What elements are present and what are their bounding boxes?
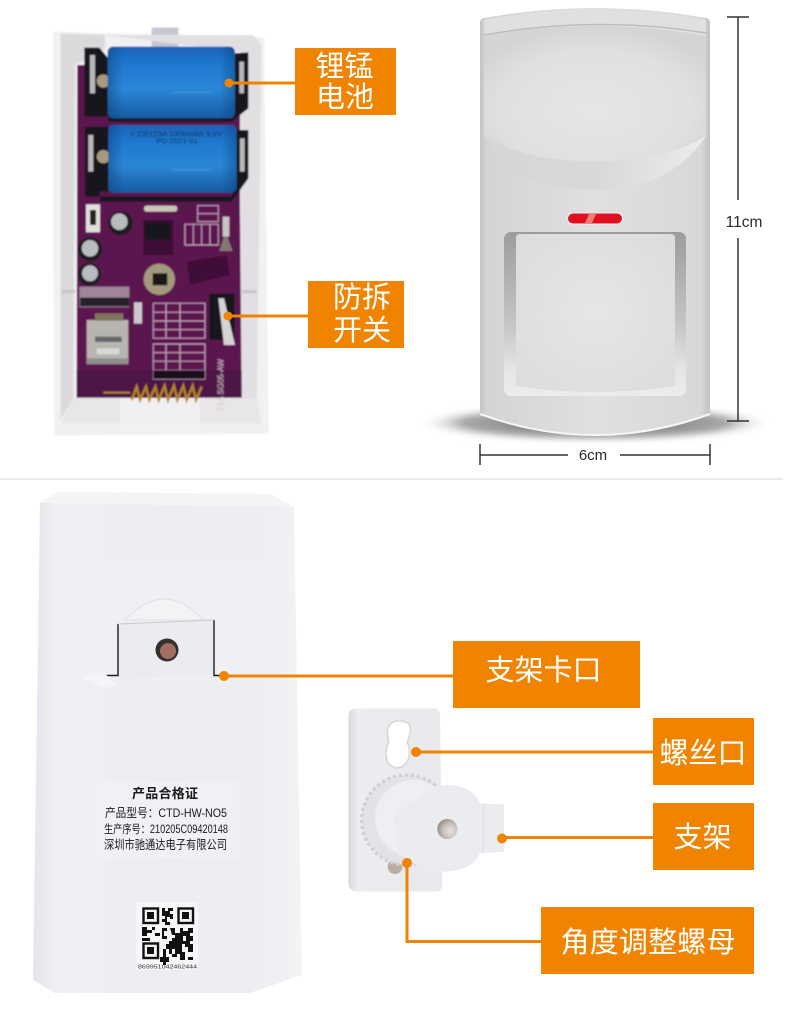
QR code bbox=[136, 902, 198, 970]
mounting tab bbox=[81, 599, 220, 688]
callout: lithium battery: 电池 bbox=[316, 81, 374, 114]
device casing bbox=[53, 28, 269, 436]
callout: tamper switch bbox=[224, 281, 404, 348]
callout: screw hole bbox=[411, 718, 754, 785]
lens window bbox=[504, 232, 686, 396]
top cap bbox=[484, 10, 706, 36]
red LED bbox=[568, 213, 622, 224]
battery holders bbox=[84, 48, 248, 202]
certificate label: 生产序号：210205C09420148 bbox=[104, 822, 228, 836]
callout: bracket slot: 支架卡口 bbox=[485, 654, 602, 687]
lithium battery top bbox=[108, 47, 235, 118]
crescent fold bbox=[484, 136, 706, 190]
bracket hole bbox=[437, 819, 457, 839]
callout: tamper switch: 防拆 bbox=[333, 281, 391, 314]
base plate bbox=[348, 708, 442, 892]
certificate label: 产品型号：CTD-HW-NO5 bbox=[105, 806, 227, 820]
callout: angle adjustment nut bbox=[402, 858, 754, 974]
dimension: width 6cm bbox=[480, 444, 710, 465]
certificate label bbox=[96, 782, 239, 858]
dimension: height 11cm bbox=[726, 17, 762, 421]
dimension: height 11cm: 11cm bbox=[726, 214, 762, 231]
board silkscreen markings: T1A SG05-AW bbox=[216, 358, 225, 411]
lithium battery bottom: PD:2021-01 bbox=[156, 137, 198, 146]
bracket arm bbox=[393, 785, 504, 872]
sensor body bbox=[480, 8, 710, 435]
circuit board bbox=[77, 65, 242, 411]
callout: angle adjustment nut: 角度调整螺母 bbox=[560, 926, 736, 959]
panel: circuit board photo bbox=[53, 28, 269, 436]
callout: bracket: 支架 bbox=[673, 821, 732, 854]
panel: back of sensor bbox=[33, 492, 302, 993]
certificate label: 产品合格证 bbox=[132, 786, 198, 801]
keyhole slot bbox=[386, 721, 411, 768]
callout: bracket bbox=[497, 803, 754, 870]
ground shadow bbox=[417, 404, 773, 442]
callout: tamper switch: 开关 bbox=[333, 314, 391, 347]
callout: lithium battery: 锂锰 bbox=[315, 50, 374, 83]
QR code: 869951042462444 bbox=[138, 964, 198, 970]
callout: bracket slot bbox=[219, 641, 640, 708]
lithium battery bottom bbox=[108, 125, 237, 193]
battery printing: + CR123A 1300mAh 3.0V - bbox=[130, 131, 228, 138]
lower hole bbox=[388, 859, 402, 874]
upper dome bbox=[484, 26, 706, 161]
panel: front view of sensor bbox=[417, 8, 773, 442]
board components bbox=[78, 204, 235, 400]
gear wheel bbox=[362, 775, 452, 865]
callout: screw hole: 螺丝口 bbox=[659, 737, 747, 770]
certificate label: 深圳市驰通达电子有限公司 bbox=[104, 837, 227, 852]
callout: lithium battery bbox=[224, 48, 396, 115]
panel: mounting bracket bbox=[348, 708, 504, 892]
dimension: width 6cm: 6cm bbox=[579, 447, 607, 464]
